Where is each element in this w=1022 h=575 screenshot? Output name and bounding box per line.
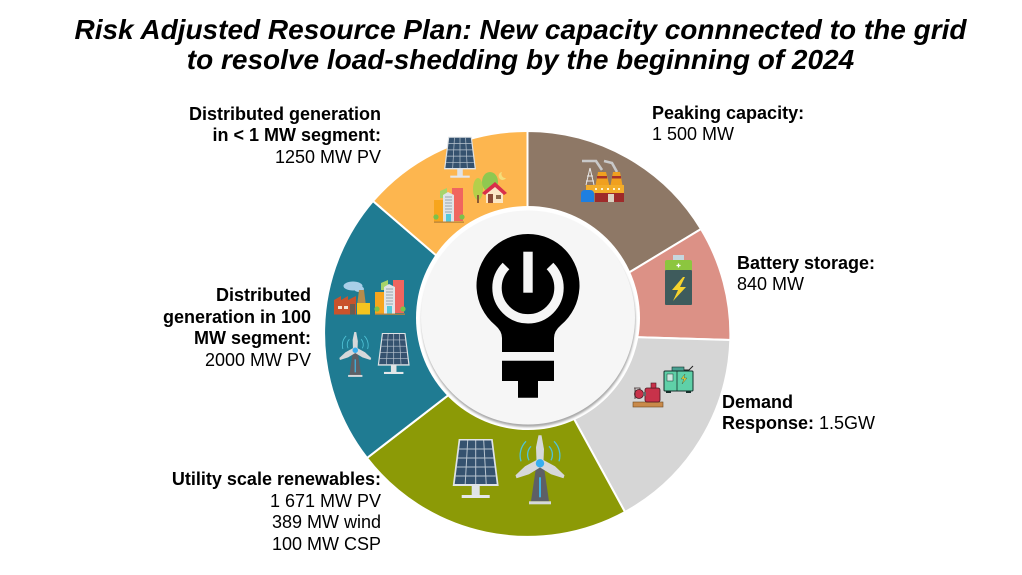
label: battery storage	[737, 253, 875, 294]
title: Risk Adjusted Resource Plan: New capacity connnected to the grid	[74, 14, 967, 45]
icon: light bulb with power symbol	[476, 234, 580, 398]
label: peaking capacity	[652, 103, 804, 144]
label: battery storage: 840 MW	[737, 274, 804, 294]
label: demand response: Response: 1.5GW	[722, 413, 875, 433]
segment: distributed generation 100 MW	[324, 201, 528, 458]
label: utility scale renewables: 100 MW CSP	[272, 534, 381, 554]
segment: utility scale renewables	[367, 334, 625, 537]
icon: generator	[664, 366, 693, 393]
icon: solar panel (utility)	[453, 439, 499, 498]
title	[74, 14, 967, 75]
label: utility scale renewables: Utility scale renewables:	[172, 469, 381, 489]
label: peaking capacity: 1 500 MW	[652, 124, 734, 144]
label: utility scale renewables	[172, 469, 381, 554]
label: distributed generation under 1 MW: Distributed generation	[189, 104, 381, 124]
label: distributed generation 100 MW: generation in 100	[163, 307, 311, 327]
icon: house and trees	[473, 172, 507, 203]
icon: power plant	[581, 161, 624, 202]
label: distributed generation under 1 MW: 1250 MW PV	[275, 147, 381, 167]
donut chart	[324, 131, 730, 537]
segment: demand response	[528, 334, 730, 512]
label: utility scale renewables: 1 671 MW PV	[270, 491, 381, 511]
icon: battery	[665, 255, 692, 305]
icon: solar panel (under 1 MW)	[444, 137, 476, 178]
icon: solar panel (100 MW)	[378, 333, 410, 374]
segment: battery storage	[528, 229, 730, 340]
segment: distributed generation under 1 MW	[373, 131, 528, 334]
label: battery storage: Battery storage:	[737, 253, 875, 273]
label: peaking capacity: Peaking capacity:	[652, 103, 804, 123]
title: to resolve load-shedding by the beginning of 2024	[187, 44, 855, 75]
label: distributed generation 100 MW: 2000 MW PV	[205, 350, 311, 370]
label: distributed generation 100 MW	[163, 285, 311, 370]
label: distributed generation under 1 MW: in < 1 MW segment:	[212, 125, 381, 145]
icon: wind turbine (utility)	[516, 435, 564, 504]
icon: city buildings (under 1 MW)	[433, 188, 465, 223]
label: distributed generation 100 MW: MW segment:	[194, 328, 311, 348]
icon: wind turbine (100 MW)	[339, 332, 371, 377]
label: demand response: Demand	[722, 392, 793, 412]
label: distributed generation under 1 MW	[189, 104, 381, 167]
icon: city buildings (100 MW)	[374, 280, 406, 315]
label: demand response	[722, 392, 875, 433]
label: distributed generation 100 MW: Distributed	[216, 285, 311, 305]
icon: factory	[334, 282, 370, 314]
icon: pump	[633, 383, 663, 407]
segment: peaking capacity	[528, 131, 701, 334]
label: utility scale renewables: 389 MW wind	[272, 512, 381, 532]
center disc	[416, 206, 640, 430]
